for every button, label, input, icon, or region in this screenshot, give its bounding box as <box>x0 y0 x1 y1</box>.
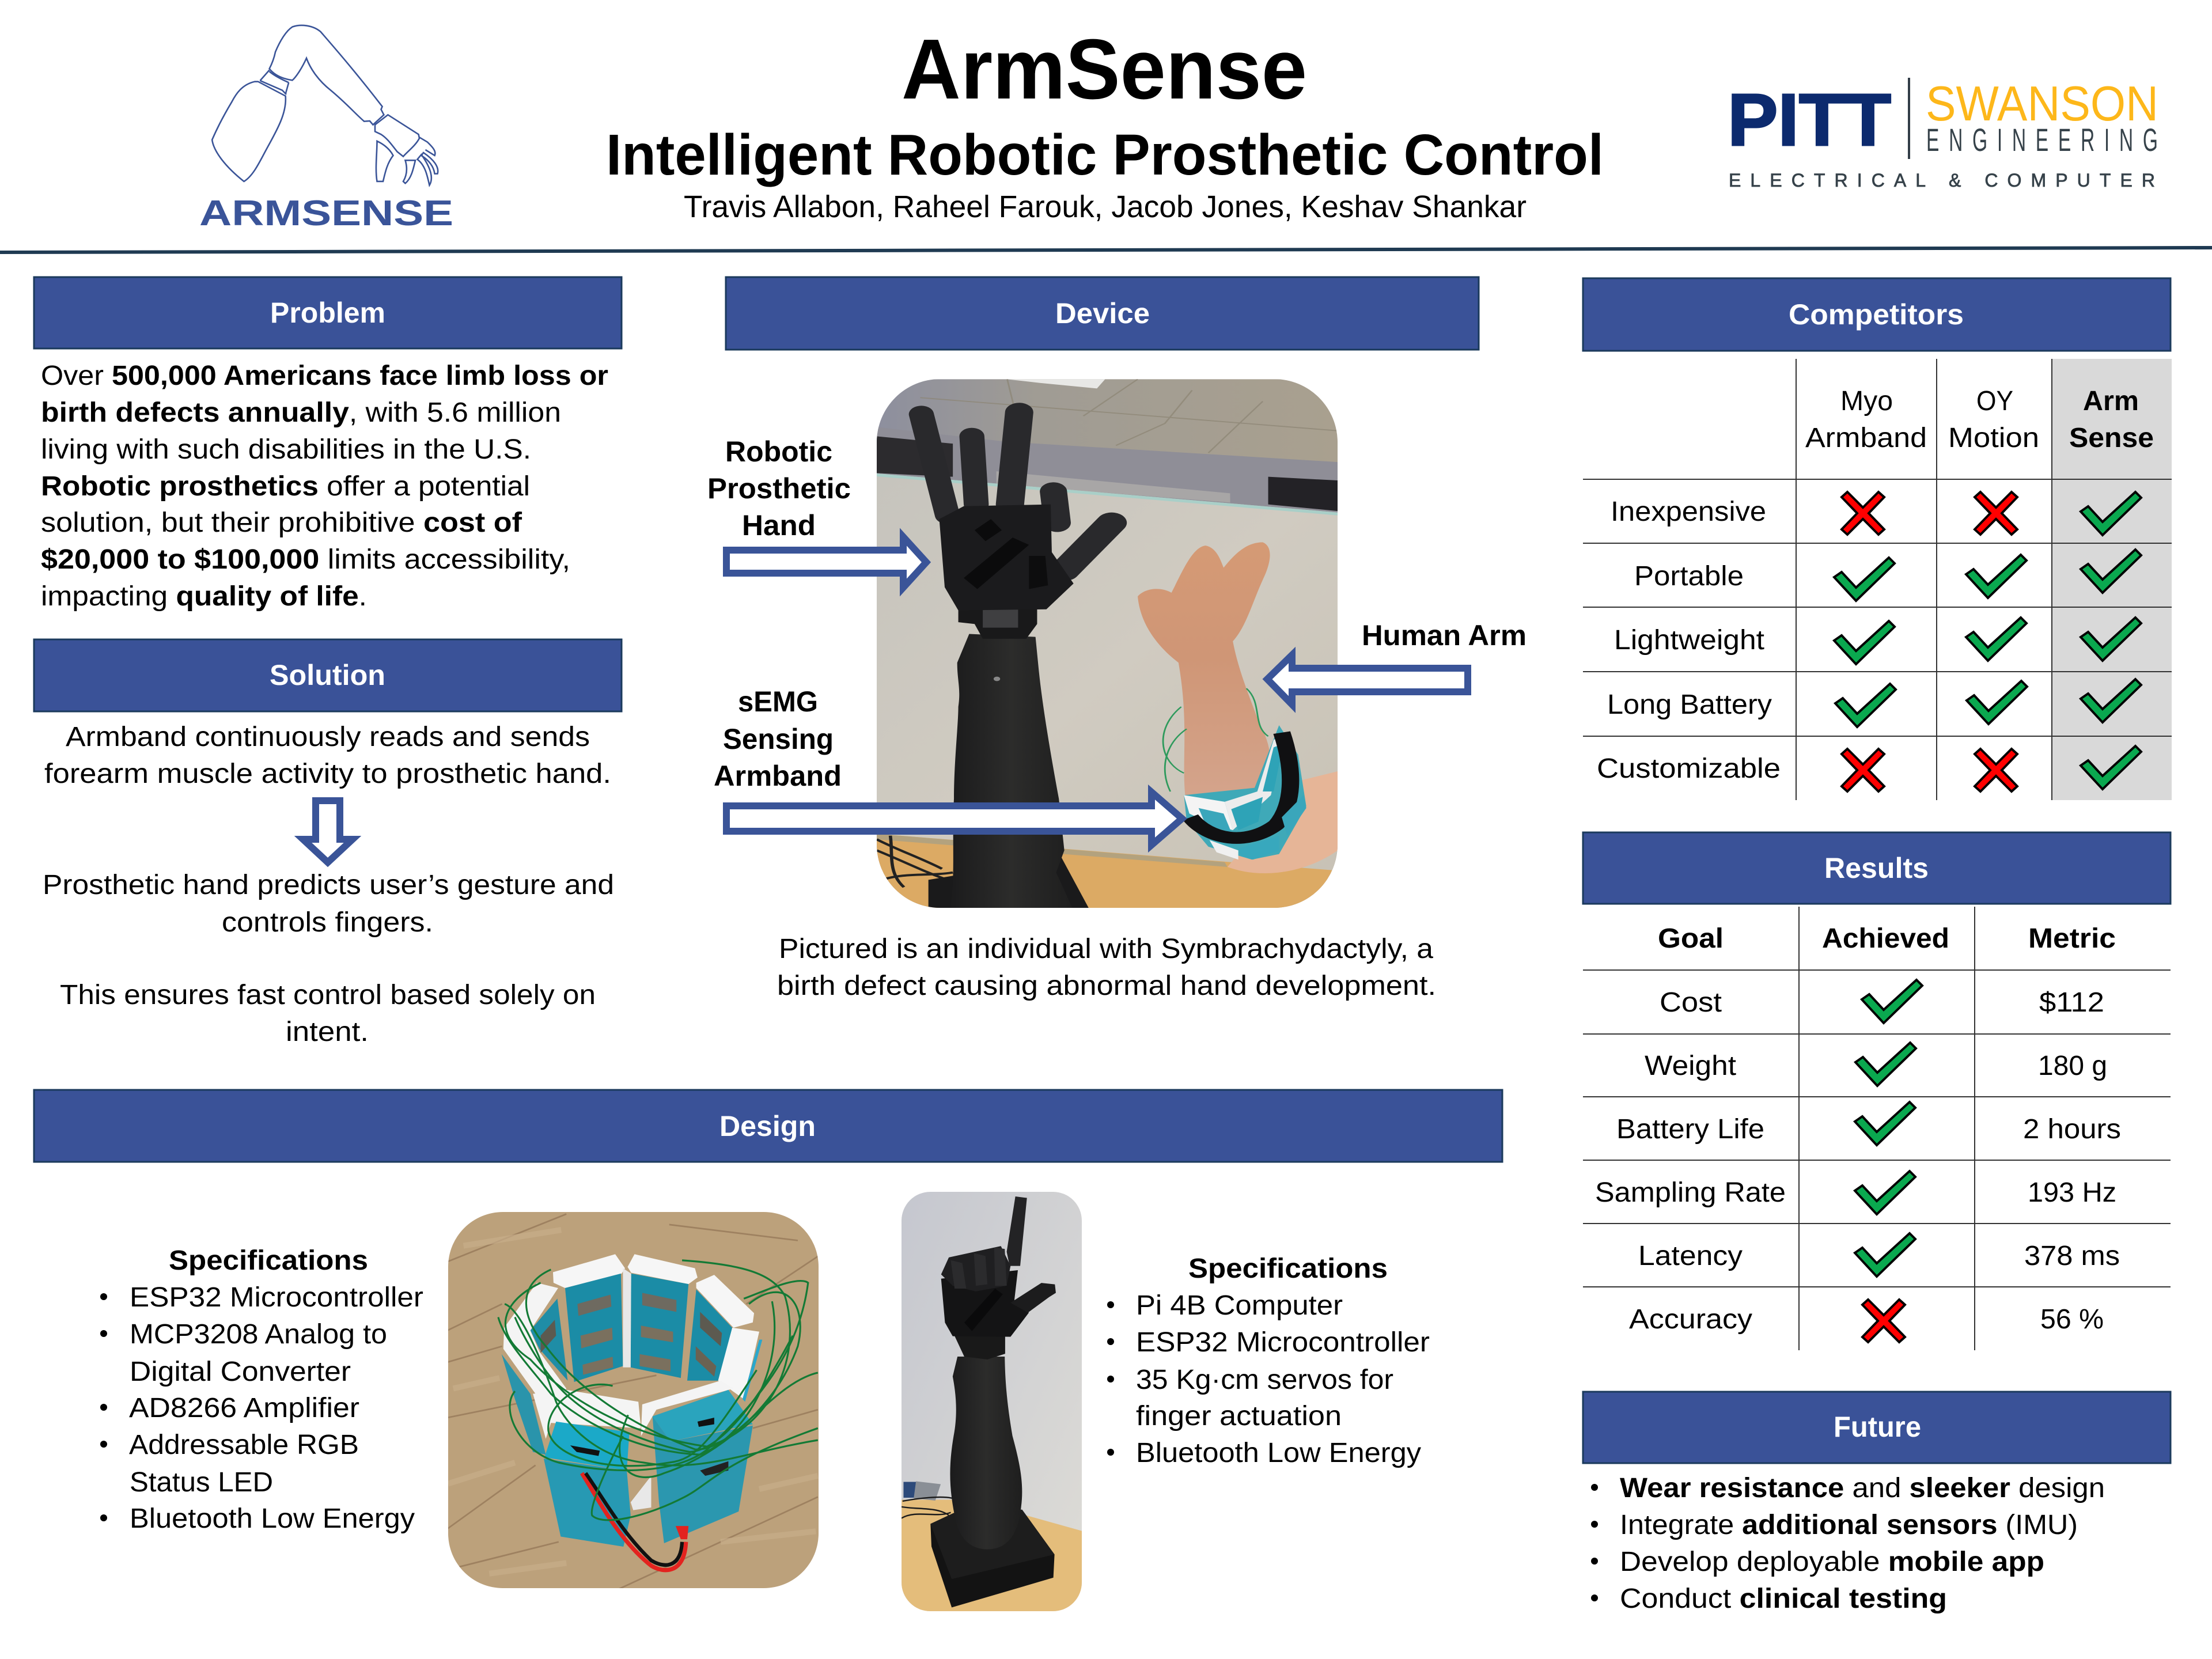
text block: armband specifications: Bluetooth Low Energy <box>130 1503 415 1534</box>
logo: SWANSON: SWANSON <box>1926 77 2158 131</box>
text block: armband specifications: Addressable RGB <box>129 1430 359 1460</box>
heading: results: Results <box>1824 852 1929 884</box>
text block: armband reads: forearm muscle activity to prosthetic hand. <box>44 759 611 789</box>
label: sEMG sensing armband <box>714 685 842 792</box>
table: results: Cost <box>1660 987 1722 1018</box>
table: results <box>1583 907 2171 1350</box>
text block: prosthetic specifications: 35 Kg·cm servos for <box>1136 1365 1393 1395</box>
heading: device: Device <box>1055 297 1150 329</box>
table: results: Latency <box>1638 1241 1743 1271</box>
arrow: down <box>303 801 353 862</box>
text block: armband specifications: AD8266 Amplifier <box>129 1393 359 1423</box>
table: results: Accuracy <box>1629 1304 1752 1335</box>
list: future work: Develop deployable mobile app <box>1620 1547 2044 1577</box>
icon: robotic arm outline <box>212 25 438 185</box>
text block: armband specifications <box>100 1245 423 1534</box>
table: competitors: Inexpensive <box>1611 497 1766 527</box>
text block: device caption: birth defect causing abnormal hand development. <box>777 971 1436 1001</box>
heading: design: Design <box>719 1110 816 1142</box>
label: robotic prosthetic hand <box>707 435 851 541</box>
icons: row customizable <box>1842 746 2141 791</box>
logo: Pitt Swanson Engineering <box>1728 77 2158 191</box>
table: results: $112 <box>2039 987 2104 1018</box>
text block: problem: solution, but their prohibitive cost of <box>41 507 522 538</box>
panel: future <box>1583 1392 2171 1614</box>
label: robotic prosthetic hand: Robotic <box>725 435 832 468</box>
heading: device <box>726 277 1479 350</box>
text block: problem: living with such disabilities in the U.S. <box>41 434 531 465</box>
table: competitors: Arm <box>2083 386 2139 416</box>
table: competitors <box>1583 359 2172 800</box>
label: sEMG sensing armband: Sensing <box>723 723 834 755</box>
table: competitors: Portable <box>1634 561 1744 592</box>
heading: solution: Solution <box>270 659 385 691</box>
icons: row lightweight <box>1834 618 2141 664</box>
arrow: to robotic hand <box>726 537 926 588</box>
table: competitors: Lightweight <box>1614 625 1764 656</box>
title: ArmSense <box>902 22 1307 117</box>
table: results: Goal <box>1658 923 1724 954</box>
table: competitors: Long Battery <box>1607 690 1772 720</box>
logo: ArmSense arm outline and wordmark <box>199 25 453 233</box>
table: results: 193 Hz <box>2028 1177 2116 1208</box>
text block: device caption <box>777 934 1436 1001</box>
table: competitors: Sense <box>2069 423 2154 453</box>
text block: prosthetic specifications: Pi 4B Computer <box>1136 1290 1343 1321</box>
authors: Travis Allabon, Raheel Farouk, Jacob Jones, Keshav Shankar <box>684 190 1527 224</box>
arrow: to human arm <box>1267 655 1468 704</box>
text block: prosthetic specifications: Bluetooth Low Energy <box>1136 1438 1421 1468</box>
logo: ENGINEERING: ENGINEERING <box>1926 122 2158 158</box>
heading: results <box>1583 832 2171 904</box>
text block: problem <box>41 361 608 612</box>
icons: row portable <box>1834 550 2141 601</box>
text block: hand predicts <box>43 870 614 938</box>
text block: armband specifications: Specifications <box>169 1245 368 1276</box>
text block: prosthetic specifications: finger actuation <box>1136 1401 1342 1431</box>
text block: prosthetic specifications: Specifications <box>1188 1253 1388 1284</box>
heading: problem <box>34 277 622 349</box>
text block: armband specifications: MCP3208 Analog to <box>130 1319 387 1350</box>
arrow: to armband <box>726 792 1182 845</box>
table: competitors: Motion <box>1948 423 2039 453</box>
table: results: 2 hours <box>2023 1114 2121 1145</box>
table: results: 378 ms <box>2024 1241 2120 1271</box>
heading: future: Future <box>1834 1411 1921 1443</box>
text block: hand predicts: controls fingers. <box>222 907 433 938</box>
header <box>199 22 2158 233</box>
list: future work: Wear resistance and sleeker design <box>1620 1473 2105 1503</box>
text block: armband reads: Armband continuously reads and sends <box>66 722 590 752</box>
text block: fast control <box>60 980 596 1047</box>
icons: achieved column <box>1855 980 1922 1342</box>
label: sEMG sensing armband: Armband <box>714 760 842 792</box>
list: future work <box>1591 1473 2105 1614</box>
table: results: Weight <box>1645 1051 1736 1081</box>
table: results: Sampling Rate <box>1595 1177 1786 1208</box>
label: robotic prosthetic hand: Hand <box>742 509 816 541</box>
icons: row inexpensive <box>1842 492 2141 535</box>
label: human arm: Human Arm <box>1362 619 1527 652</box>
text block: armband specifications: ESP32 Microcontroller <box>130 1282 423 1313</box>
list: future work: Integrate additional sensors (IMU) <box>1620 1510 2078 1540</box>
list: future work: Conduct clinical testing <box>1620 1584 1947 1614</box>
text block: armband specifications: Digital Converter <box>130 1357 351 1387</box>
photo: armband <box>445 1209 821 1592</box>
table: competitors: Customizable <box>1597 753 1781 784</box>
table: results: Achieved <box>1822 923 1949 954</box>
logo wordmark: ARMSENSE <box>199 194 453 233</box>
text block: problem: birth defects annually , with 5.6 million <box>41 397 561 428</box>
panel: solution <box>34 639 622 1047</box>
table: results: Battery Life <box>1616 1114 1764 1145</box>
text block: problem: impacting quality of life . <box>41 581 367 612</box>
panel: device <box>707 277 1527 1001</box>
heading: solution <box>34 639 622 711</box>
text block: fast control: intent. <box>286 1017 369 1047</box>
logo: PITT wordmark: PITT <box>1728 79 1891 161</box>
table: competitors: OY <box>1976 386 2013 416</box>
text block: prosthetic specifications <box>1107 1253 1430 1468</box>
table: competitors: Armband <box>1805 423 1927 453</box>
photo: prosthetic hand on stand <box>900 1190 1084 1615</box>
subtitle: Intelligent Robotic Prosthetic Control <box>606 123 1604 187</box>
text block: prosthetic specifications: ESP32 Microcontroller <box>1136 1327 1430 1358</box>
panel: results <box>1583 832 2171 1350</box>
table: competitors: Myo <box>1840 386 1893 416</box>
label: robotic prosthetic hand: Prosthetic <box>707 472 851 505</box>
text block: problem: Robotic prosthetics offer a potential <box>41 471 530 502</box>
logo: ELECTRICAL & COMPUTER: ELECTRICAL & COMPUTER <box>1729 170 2155 191</box>
photo: prosthetic hand and human arm <box>877 379 1338 908</box>
text block: fast control: This ensures fast control based solely on <box>60 980 596 1010</box>
table: results: Metric <box>2028 923 2116 954</box>
text block: problem: $20,000 to $100,000 limits accessibility, <box>41 544 570 575</box>
text block: armband reads <box>44 722 611 789</box>
heading: competitors: Competitors <box>1789 298 1964 331</box>
table: results: 180 g <box>2038 1051 2107 1081</box>
heading: problem: Problem <box>270 297 385 329</box>
text block: hand predicts: Prosthetic hand predicts user’s gesture and <box>43 870 614 900</box>
panel: problem <box>34 277 622 612</box>
icons: row long battery <box>1835 679 2141 727</box>
text block: device caption: Pictured is an individual with Symbrachydactyly, a <box>779 934 1433 964</box>
heading: competitors <box>1583 278 2171 351</box>
text block: problem: Over 500,000 Americans face limb loss or <box>41 361 608 391</box>
heading: future <box>1583 1392 2171 1463</box>
text block: armband specifications: Status LED <box>130 1467 273 1498</box>
label: sEMG sensing armband: sEMG <box>738 685 818 718</box>
panel: competitors <box>1583 278 2172 800</box>
heading: design <box>34 1090 1502 1162</box>
table: results: 56 % <box>2040 1304 2104 1335</box>
panel: design <box>34 1090 1502 1615</box>
